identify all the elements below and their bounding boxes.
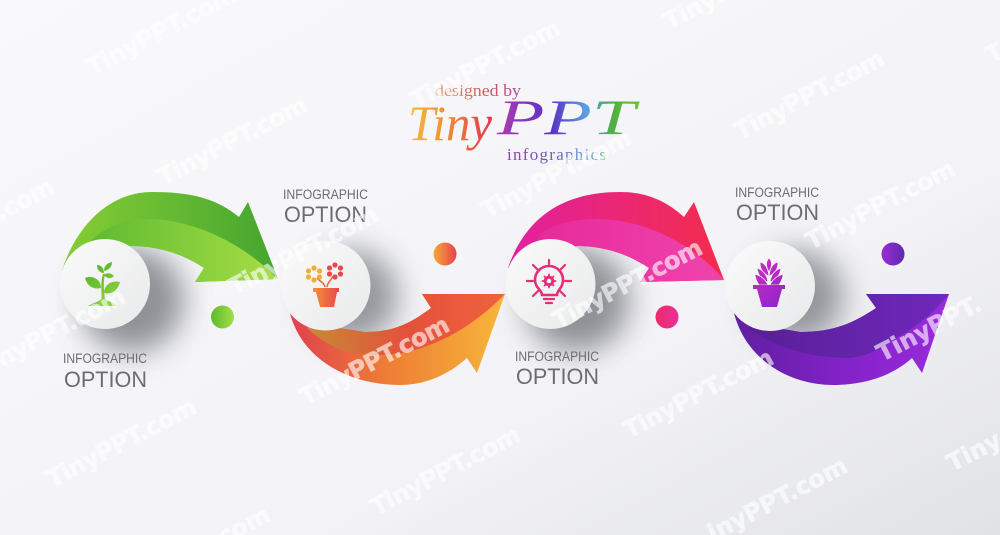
- label: step 2: INFOGRAPHIC: [283, 187, 368, 202]
- circle: step 1: [60, 239, 150, 329]
- logo: designed by: [435, 81, 522, 100]
- label: step 4: INFOGRAPHIC: [735, 185, 819, 200]
- dot: pink: [656, 306, 678, 328]
- watermarks: TinyPPT.com: [295, 310, 454, 411]
- label: step 1: OPTION: [64, 367, 147, 392]
- arrow: purple: [734, 294, 949, 385]
- watermarks: TinyPPT.: [872, 290, 986, 367]
- dot: orange: [434, 242, 456, 266]
- icon: succulent: [753, 258, 785, 307]
- watermarks: TinyPPT.com: [619, 343, 778, 444]
- watermarks: TinyPPT.com: [477, 123, 636, 224]
- label: step 3: INFOGRAPHIC: [515, 349, 599, 364]
- shadow: step 1: [80, 248, 184, 352]
- watermarks: TinyPPT.com: [366, 420, 525, 521]
- arrow: pink: [508, 192, 724, 282]
- watermarks: TinyPPT.com: [730, 44, 889, 145]
- logo: [408, 81, 640, 164]
- watermarks: TinyPPT.com: [224, 200, 383, 301]
- label: step 4: [735, 185, 819, 225]
- circle: step 3: [506, 239, 596, 329]
- logo: infographics: [507, 145, 606, 164]
- label: step 3: OPTION: [516, 364, 599, 389]
- circle: step 4: [725, 241, 815, 331]
- logo: PPT: [495, 89, 640, 145]
- dot: purple: [882, 242, 904, 266]
- label: step 1: [63, 351, 147, 392]
- icon: flower pot: [306, 262, 343, 307]
- logo: Tiny: [408, 95, 493, 151]
- label: step 3: [515, 349, 599, 389]
- watermarks: TinyPPT.com: [406, 13, 565, 114]
- arrow: orange: [290, 294, 505, 385]
- label: step 2: OPTION: [284, 202, 367, 227]
- watermarks: TinyPPT.com: [42, 392, 201, 493]
- icon: plant: [85, 262, 120, 306]
- watermarks: TinyPPT.com: [801, 154, 960, 255]
- dot: green: [211, 306, 234, 328]
- circle: step 2: [280, 240, 370, 330]
- watermarks: TinyPPT.com: [548, 233, 707, 334]
- label: step 4: OPTION: [736, 200, 819, 225]
- label: step 1: INFOGRAPHIC: [63, 351, 147, 366]
- icon: light bulb: [527, 260, 571, 303]
- shadow: step 2: [306, 250, 398, 342]
- shadow: step 3: [525, 248, 629, 352]
- label: step 2: [283, 187, 368, 227]
- watermarks: TinyPPT.com: [153, 90, 312, 191]
- shadow: step 4: [751, 250, 843, 342]
- arrow: green: [62, 192, 278, 282]
